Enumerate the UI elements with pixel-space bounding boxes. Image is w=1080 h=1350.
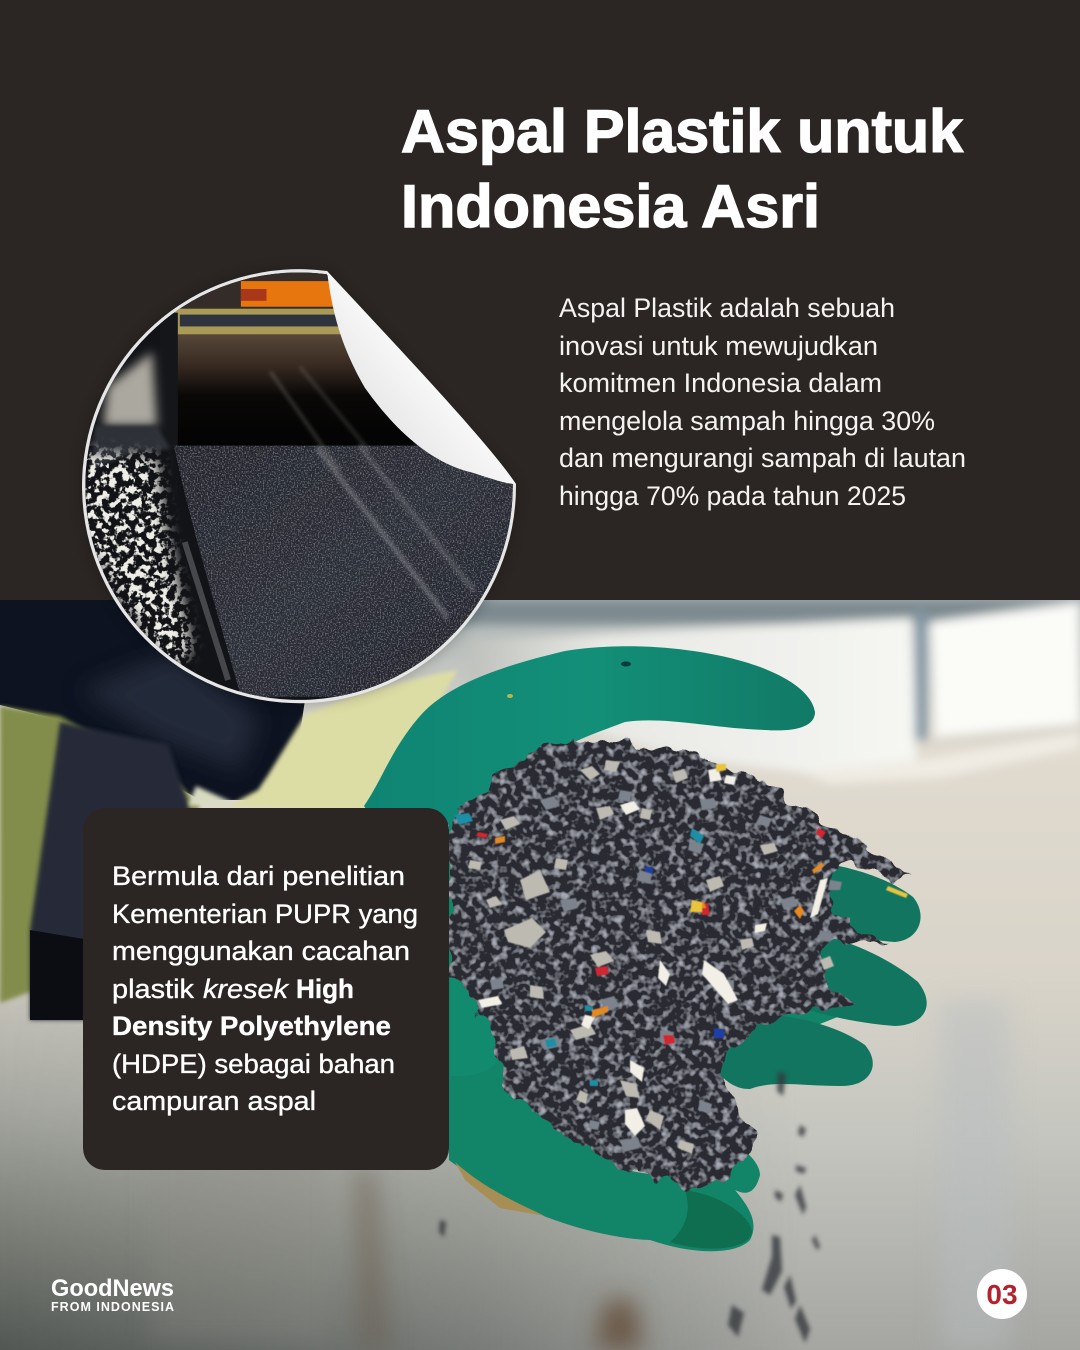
panel text: Density Polyethylene [112, 1011, 391, 1041]
logo: GoodNews from Indonesia: GoodNews [51, 1275, 174, 1302]
title [401, 98, 964, 240]
shadow of asphalt badge [82, 269, 516, 703]
heap of shredded plastic [449, 741, 905, 1188]
title: Indonesia Asri [401, 173, 820, 240]
panel text [112, 861, 418, 1116]
dark sleeve [0, 600, 305, 800]
panel text: Bermula dari penelitian [112, 861, 405, 891]
page curl [327, 271, 516, 484]
circular asphalt photo with peeling corner [73, 263, 527, 716]
light plastic flakes [468, 760, 834, 1154]
panel text: (HDPE) sebagai bahan [112, 1049, 395, 1079]
gloved hand holding plastic shreds [0, 600, 927, 1343]
white rim [82, 269, 516, 703]
panel text: menggunakan cacahan [112, 936, 410, 966]
navy knitted cuff [30, 722, 190, 1020]
background photo [0, 600, 1080, 1350]
panel text: campuran aspal [112, 1086, 316, 1116]
fingers and palm [700, 860, 927, 1089]
olive jacket sleeve [0, 706, 200, 1003]
page number badge: 03 [986, 1279, 1018, 1310]
intro paragraph: komitmen Indonesia dalam [559, 368, 882, 398]
intro paragraph [559, 293, 966, 511]
pale yellow glove lining [228, 670, 458, 812]
glove back and thumb [364, 646, 815, 825]
dark header background [0, 0, 1080, 600]
logo: GoodNews from Indonesia: FROM INDONESIA [51, 1300, 174, 1314]
panel text: Kementerian PUPR yang [112, 899, 418, 929]
road edge stripe [185, 542, 228, 680]
white glove edge [188, 786, 236, 806]
logo: GoodNews from Indonesia [51, 1275, 174, 1314]
left gravel patches [103, 352, 157, 426]
panel text: High [296, 974, 354, 1004]
falling plastic particles [439, 1072, 820, 1343]
intro paragraph: inovasi untuk mewujudkan [559, 331, 878, 361]
panel text: kresek [203, 974, 290, 1004]
coloured flakes [476, 828, 826, 1045]
title: Aspal Plastik untuk [401, 98, 964, 165]
page number badge [977, 1269, 1027, 1319]
intro paragraph: hingga 70% pada tahun 2025 [559, 481, 906, 511]
light streaks [270, 367, 474, 618]
intro paragraph: dan mengurangi sampah di lautan [559, 443, 966, 473]
paving machine [176, 272, 334, 311]
road surface [174, 446, 517, 697]
intro paragraph: mengelola sampah hingga 30% [559, 406, 935, 436]
intro paragraph: Aspal Plastik adalah sebuah [559, 293, 895, 323]
plastic flakes [455, 760, 908, 1154]
panel text: plastik [112, 974, 195, 1004]
tip highlights [507, 694, 513, 698]
panel: research origin [83, 808, 449, 1170]
glove palm base [370, 745, 880, 1170]
